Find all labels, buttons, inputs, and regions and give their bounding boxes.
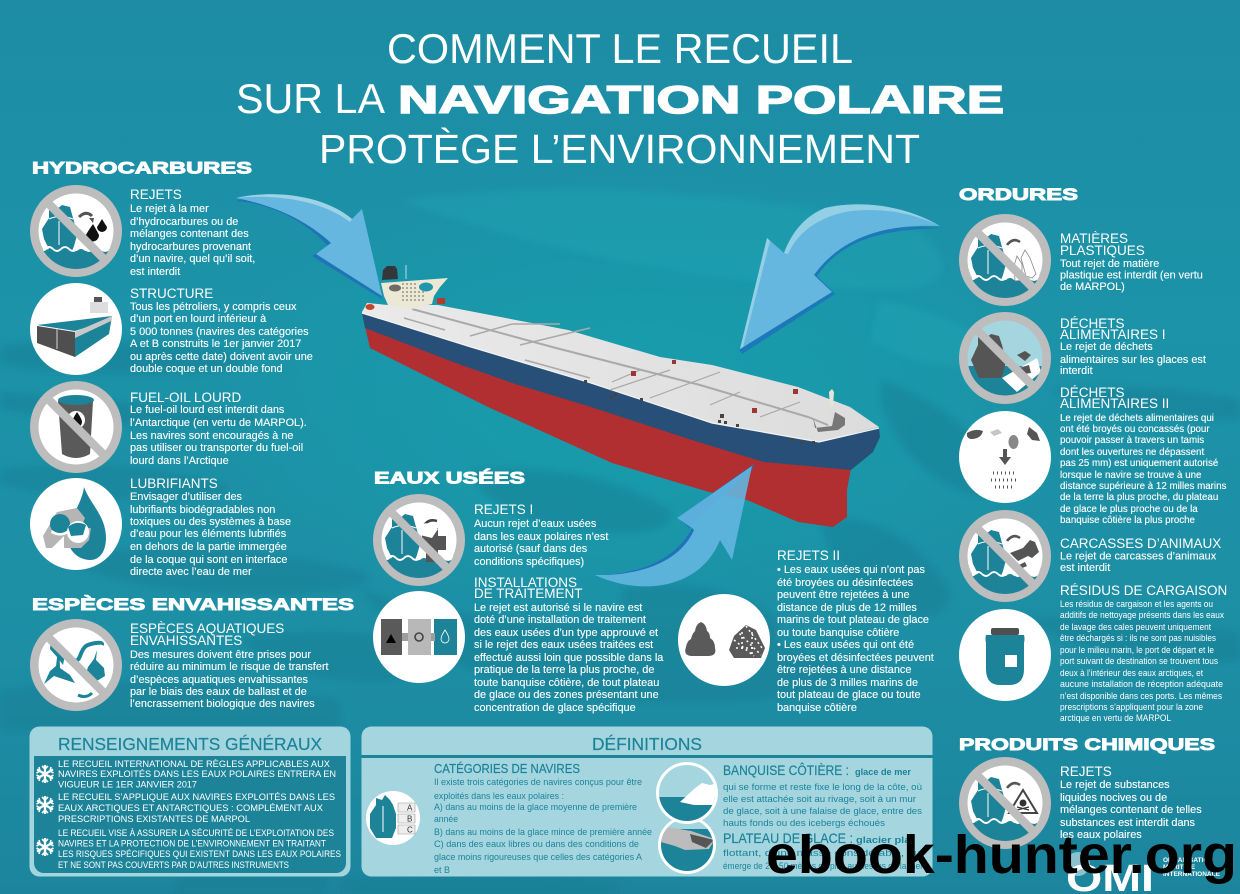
text: banquise côtière: glace de mer: [855, 766, 911, 777]
icon: double hull: [30, 283, 122, 375]
block: déchets alimentaires II: dont les ouvertures ne dépassent: [1060, 447, 1204, 458]
logo: OMI: INTERNATIONALE: [1163, 871, 1221, 878]
block: rejets II: • Les eaux usées qui ont été: [777, 639, 914, 651]
panel: renseignements généraux: [30, 726, 350, 876]
block: rejets II: [777, 548, 934, 714]
block: lubrifiants: de la coque qui sont en interface: [130, 554, 287, 566]
text: plateau de glace: glacier plat: [856, 834, 914, 845]
block: structure: [130, 286, 313, 375]
block: résidus de cargaison: arctique en vertu de MARPOL: [1060, 713, 1171, 723]
block: fuel-oil lourd: [130, 390, 307, 467]
icon: no plastics: [959, 214, 1054, 306]
block: fuel-oil lourd: pas utiliser ou transporter du fuel-oil: [130, 442, 303, 454]
block: lubrifiants: directe avec l’eau de mer: [130, 566, 252, 578]
block: résidus de cargaison: prescriptions s’appliquent pour la zone: [1060, 702, 1203, 712]
block: déchets alimentaires II: pas 25 mm) est uniquement autorisé: [1060, 458, 1218, 469]
block: rejets chimiques: les eaux polaires: [1060, 829, 1142, 841]
text: general information: NAVIRES ET LA PROTECTION DE L’ENVIRONNEMENT EN TRAITANT: [58, 838, 326, 848]
block: installations de traitement: INSTALLATIONS: [474, 575, 577, 590]
block: rejets I: dans les eaux polaires n’est: [474, 531, 608, 543]
title: SUR LA: [236, 75, 385, 122]
arrow: bottom centre: [595, 464, 754, 586]
block: lubrifiants: LUBRIFIANTS: [130, 476, 218, 491]
block: carcasses d'animaux: est interdit: [1060, 562, 1110, 574]
block: déchets alimentaires I: Le rejet de déchets: [1060, 341, 1153, 353]
block: rejets: hydrocarbures provenant: [130, 241, 251, 253]
block: installations de traitement: effectué aussi loin que possible dans la: [474, 652, 664, 664]
block: structure: d’un port en lourd inférieur à: [130, 313, 267, 325]
icon: treatment plant: [373, 591, 465, 683]
block: installations de traitement: si le rejet des eaux usées traitées est: [474, 639, 653, 651]
block: espèces aquatiques: réduire au minimum le risque de transfert: [130, 661, 329, 673]
block: rejets chimiques: [1060, 764, 1202, 841]
block: espèces aquatiques: ENVAHISSANTES: [130, 633, 242, 648]
icon: shelf ice circle: [658, 820, 716, 874]
block: lubrifiants: d’eau pour les éléments lubrifiés: [130, 528, 287, 540]
block: rejets II: banquise côtière: [777, 702, 857, 714]
block: matières plastiques: PLASTIQUES: [1060, 243, 1145, 258]
block: rejets chimiques: mélanges contenant de telles: [1060, 804, 1202, 816]
heading: produits chimiques: PRODUITS CHIMIQUES: [959, 736, 1215, 754]
block: carcasses d'animaux: CARCASSES D’ANIMAUX: [1060, 536, 1221, 551]
block: espèces aquatiques: par le biais des eaux de ballast et de: [130, 686, 307, 698]
block: rejets I: REJETS I: [474, 502, 533, 517]
arrow: top-right: [725, 204, 941, 354]
block: matières plastiques: de MARPOL): [1060, 281, 1125, 293]
block: déchets alimentaires I: interdit: [1060, 365, 1093, 377]
block: résidus de cargaison: n’est disponible dans ces ports. Les mêmes: [1060, 691, 1222, 701]
block: carcasses d'animaux: [1060, 536, 1221, 574]
block: structure: STRUCTURE: [130, 286, 213, 301]
text: banquise côtière: BANQUISE CÔTIÈRE :: [723, 762, 849, 778]
block: installations de traitement: de glace ou des zones présentant une: [474, 689, 659, 701]
block: installations de traitement: pratique de la terre la plus proche, de: [474, 664, 654, 676]
text: plateau de glace: [723, 831, 923, 871]
icon: no oil discharge: [30, 185, 125, 277]
icon: cargo residue jar: [959, 609, 1051, 701]
block: installations de traitement: concentration de glace spécifique: [474, 702, 636, 714]
icon: heavy fuel oil drum: [30, 381, 122, 473]
text: plateau de glace: émerge de 2 à 50 mètres ou plus au-dessus de la mer: [723, 860, 923, 871]
text: catégories de navires: et B: [434, 864, 450, 875]
block: déchets alimentaires II: pouvoir passer à travers un tamis: [1060, 435, 1204, 446]
heading: eaux usées: EAUX USÉES: [374, 468, 525, 488]
block: matières plastiques: MATIÈRES: [1060, 231, 1128, 246]
block: résidus de cargaison: port suivant de destination se trouvent tous: [1060, 656, 1218, 666]
text: catégories de navires: CATÉGORIES DE NAVIRES: [434, 761, 580, 776]
block: résidus de cargaison: de lavage des cales peuvent uniquement: [1060, 622, 1211, 632]
text: banquise côtière: hauts fonds ou des icebergs échoués: [723, 817, 885, 828]
block: déchets alimentaires II: DÉCHETS: [1060, 385, 1125, 400]
logo: OMI: ORGANISATION: [1163, 857, 1213, 864]
block: déchets alimentaires II: de la terre la plus proche, du plateau: [1060, 492, 1218, 503]
title: NAVIGATION POLAIRE: [398, 79, 1004, 122]
block: résidus de cargaison: [1060, 583, 1227, 723]
title: [236, 25, 1004, 172]
block: déchets alimentaires I: alimentaires sur les glaces est: [1060, 354, 1206, 366]
block: rejets I: conditions spécifiques): [474, 556, 584, 568]
text: banquise côtière: elle est attachée soit au rivage, soit à un mur: [723, 793, 916, 804]
block: rejets: [130, 187, 255, 278]
block: espèces aquatiques: ESPÈCES AQUATIQUES: [130, 621, 284, 636]
block: déchets alimentaires I: [1060, 316, 1206, 377]
heading: espèces envahissantes: ESPÈCES ENVAHISSANTES: [32, 595, 354, 614]
block: rejets I: autorisé (sauf dans des: [474, 543, 588, 555]
text: general information: PRESCRIPTIONS EXISTANTES DE MARPOL: [58, 813, 250, 824]
text: catégories de navires: C) dans des eaux libres ou dans des conditions de: [434, 838, 639, 849]
block: résidus de cargaison: être déchargés si : ils ne sont pas nuisibles: [1060, 633, 1216, 643]
text: general information: LES RISQUES SPÉCIFIQUES QUI EXISTENT DANS LES EAUX POLAIRES: [58, 848, 341, 859]
block: lubrifiants: [130, 476, 291, 578]
block: installations de traitement: toute banquise côtière, de tout plateau: [474, 677, 659, 689]
block: rejets II: broyées et désinfectées peuvent: [777, 652, 934, 664]
icon: lubricant drop: [30, 478, 122, 570]
block: résidus de cargaison: additifs de nettoyage présents dans les eaux: [1060, 610, 1224, 620]
block: rejets I: [474, 502, 608, 568]
logo: OMI: [1066, 852, 1221, 894]
text: catégories de navires: année: [434, 813, 458, 824]
text: banquise côtière: [723, 762, 922, 828]
text: plateau de glace: PLATEAU DE GLACE :: [723, 831, 853, 846]
text: general information: ET NE SONT PAS COUVERTS PAR D’AUTRES INSTRUMENTS: [58, 859, 289, 870]
icon: ship categories: B: [407, 814, 412, 824]
arrow: top-left: [236, 194, 382, 299]
block: lubrifiants: Envisager d’utiliser des: [130, 491, 243, 503]
block: espèces aquatiques: l’encrassement biologique des navires: [130, 698, 315, 710]
text: general information: VIGUEUR LE 1ER JANVIER 2017: [58, 778, 197, 790]
block: lubrifiants: lubrifiants biodégradables non: [130, 504, 275, 516]
block: rejets II: REJETS II: [777, 548, 840, 563]
block: rejets II: marins de tout plateau de glace: [777, 614, 929, 626]
block: installations de traitement: [474, 575, 664, 714]
block: rejets: d’un navire, quel qu’il soit,: [130, 253, 255, 265]
text: catégories de navires: Il existe trois catégories de navires conçus pour être: [434, 776, 642, 787]
block: espèces aquatiques: Des mesures doivent être prises pour: [130, 649, 311, 661]
block: rejets II: peuvent être rejetées à une: [777, 589, 910, 601]
block: espèces aquatiques: [130, 621, 329, 710]
block: rejets II: tout plateau de glace ou toute: [777, 689, 921, 701]
block: rejets chimiques: Le rejet de substances: [1060, 779, 1170, 791]
block: déchets alimentaires II: Le rejet de déchets alimentaires qui: [1060, 413, 1214, 424]
block: résidus de cargaison: RÉSIDUS DE CARGAISON: [1060, 583, 1227, 598]
icon: comminuted food waste: [959, 411, 1051, 503]
block: déchets alimentaires II: ALIMENTAIRES II: [1060, 396, 1169, 411]
watermark: ebook-hunter.org: [766, 825, 1237, 885]
block: matières plastiques: [1060, 231, 1203, 293]
icon: no chemicals: [959, 757, 1054, 849]
icon: ship categories: C: [407, 826, 413, 834]
block: installations de traitement: Le rejet est autorisé si le navire est: [474, 602, 642, 614]
text: general information: NAVIRES EXPLOITÉS DANS LES EAUX POLAIRES ENTRERA EN: [58, 768, 336, 779]
text: general information: LE RECUEIL INTERNATIONAL DE RÈGLES APPLICABLES AUX: [58, 758, 331, 769]
block: déchets alimentaires II: banquise côtière la plus proche: [1060, 515, 1195, 526]
block: structure: Tous les pétroliers, y compris ceux: [130, 301, 297, 313]
block: déchets alimentaires II: distance supérieure à 12 milles marins: [1060, 481, 1226, 492]
block: rejets chimiques: REJETS: [1060, 764, 1112, 779]
block: fuel-oil lourd: Le fuel-oil lourd est interdit dans: [130, 404, 285, 416]
block: rejets II: été broyées ou désinfectées: [777, 577, 914, 589]
block: carcasses d'animaux: Le rejet de carcasses d’animaux: [1060, 550, 1217, 562]
icon: no animal carcasses: [959, 510, 1054, 602]
text: catégories de navires: B) dans au moins de la glace mince de première année: [434, 826, 652, 837]
icon: no food waste on ice: [959, 312, 1051, 404]
block: déchets alimentaires I: DÉCHETS: [1060, 316, 1125, 331]
block: rejets II: ou toute banquise côtière: [777, 627, 899, 639]
block: installations de traitement: doté d’une installation de traitement: [474, 614, 646, 626]
text: general information: [58, 758, 341, 870]
block: rejets: mélanges contenant des: [130, 228, 249, 240]
block: rejets II: de plus de 3 milles marins de: [777, 677, 918, 689]
block: structure: 5 000 tonnes (navires des catégories: [130, 326, 309, 338]
text: banquise côtière: qui se forme et reste fixe le long de la côte, où: [723, 781, 922, 792]
text: banquise côtière: de glace, soit à une falaise de glace, entre des: [723, 805, 922, 816]
block: fuel-oil lourd: lourd dans l’Arctique: [130, 455, 229, 467]
block: structure: A et B construits le 1er janvier 2017: [130, 338, 301, 350]
block: rejets II: distance de plus de 12 milles: [777, 602, 917, 614]
ship superstructure: [366, 265, 448, 310]
block: déchets alimentaires II: de glace le plus proche ou de la: [1060, 504, 1198, 515]
text: general information: EAUX ARCTIQUES ET ANTARCTIQUES : COMPLÉMENT AUX: [58, 802, 324, 813]
block: rejets: REJETS: [130, 187, 182, 202]
block: matières plastiques: Tout rejet de matière: [1060, 258, 1159, 270]
icon: sewage and comminuted sewage: [678, 594, 770, 686]
block: rejets: Le rejet à la mer: [130, 203, 209, 215]
block: rejets I: Aucun rejet d’eaux usées: [474, 518, 597, 530]
block: rejets chimiques: liquides nocives ou de: [1060, 792, 1167, 804]
block: lubrifiants: toxiques ou des systèmes à base: [130, 516, 291, 528]
text: catégories de navires: glace moins rigoureuses que celles des catégories A: [434, 851, 643, 862]
block: résidus de cargaison: pour le milieu marin, le port de départ et le: [1060, 645, 1214, 655]
block: rejets chimiques: substances est interdit dans: [1060, 817, 1196, 829]
block: rejets: d’hydrocarbures ou de: [130, 216, 238, 228]
icon: invasive species: [30, 619, 122, 711]
icon: no sewage discharge: [373, 494, 468, 586]
tanker ship: [362, 265, 880, 527]
text: catégories de navires: [434, 761, 652, 875]
panel heading: RENSEIGNEMENTS GÉNÉRAUX: [58, 734, 322, 754]
text: general information: LE RECUEIL S’APPLIQUE AUX NAVIRES EXPLOITÉS DANS LES: [58, 791, 335, 802]
block: rejets: est interdit: [130, 266, 180, 278]
block: résidus de cargaison: aucune installation de réception adéquate: [1060, 679, 1223, 689]
block: lubrifiants: en dehors de la partie immergée: [130, 541, 287, 553]
icon: fast ice circle: [655, 762, 719, 827]
title: PROTÈGE L’ENVIRONNEMENT: [319, 126, 920, 172]
block: fuel-oil lourd: Les navires sont encouragés à ne: [130, 430, 293, 442]
heading: hydrocarbures: HYDROCARBURES: [32, 160, 252, 178]
icon: ship categories: [366, 791, 420, 845]
block: rejets II: être rejetées à une distance: [777, 664, 911, 676]
title: COMMENT LE RECUEIL: [387, 25, 853, 72]
block: résidus de cargaison: Les résidus de cargaison et les agents ou: [1060, 599, 1213, 609]
block: espèces aquatiques: d’espèces aquatiques envahissantes: [130, 674, 309, 686]
block: résidus de cargaison: deux à l’intérieur des eaux arctiques, et: [1060, 668, 1203, 678]
block: installations de traitement: des eaux usées d’un type approuvé et: [474, 627, 658, 639]
block: déchets alimentaires I: ALIMENTAIRES I: [1060, 327, 1166, 342]
text: general information: LE RECUEIL VISE À ASSURER LA SÉCURITÉ DE L’EXPLOITATION DES: [58, 827, 334, 838]
block: déchets alimentaires II: ont été broyés ou concassés (pour: [1060, 424, 1210, 435]
block: déchets alimentaires II: lorsque le navire se trouve à une: [1060, 470, 1201, 481]
icon: ship categories: A: [407, 804, 413, 812]
panel: définitions: [362, 726, 932, 876]
block: structure: ou après cette date) doivent avoir une: [130, 351, 313, 363]
block: structure: double coque et un double fond: [130, 363, 283, 375]
text: catégories de navires: A) dans au moins de la glace moyenne de première: [434, 801, 637, 812]
block: déchets alimentaires II: [1060, 385, 1226, 526]
text: plateau de glace: flottant, d’une masse considérable, qui: [723, 847, 923, 858]
block: fuel-oil lourd: l’Antarctique (en vertu de MARPOL).: [130, 417, 307, 429]
logo: OMI: MARITIME: [1163, 864, 1196, 871]
panel heading: DÉFINITIONS: [592, 734, 702, 754]
block: matières plastiques: plastique est interdit (en vertu: [1060, 270, 1203, 282]
block: rejets II: • Les eaux usées qui n’ont pas: [777, 564, 925, 576]
block: fuel-oil lourd: FUEL-OIL LOURD: [130, 390, 242, 405]
text: catégories de navires: exploités dans les eaux polaires :: [434, 790, 564, 801]
block: installations de traitement: DE TRAITEMENT: [474, 586, 583, 601]
icon: snowflakes: [36, 765, 54, 856]
heading: ordures: ORDURES: [959, 186, 1078, 204]
